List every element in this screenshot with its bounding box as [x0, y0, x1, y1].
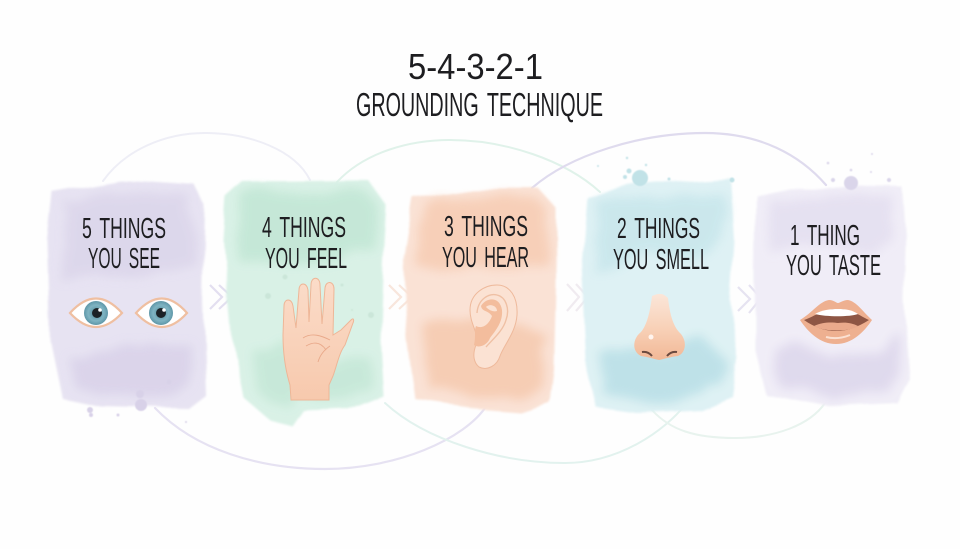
arrow: hear to smell — [567, 284, 588, 311]
icon: nose — [634, 294, 685, 360]
heading: 5 things you see: 5 THINGS — [82, 213, 166, 245]
title: GROUNDING TECHNIQUE — [356, 86, 603, 123]
panel: 1 thing you taste — [755, 153, 910, 407]
arrow: see to feel — [210, 285, 232, 309]
arrow: feel to hear — [389, 285, 412, 309]
panel: 3 things you hear — [404, 188, 556, 412]
heading: 5 things you see: YOU SEE — [88, 243, 160, 275]
panel: 4 things you feel — [223, 180, 386, 428]
heading: 4 things you feel: YOU FEEL — [265, 243, 347, 275]
heading: 1 thing you taste — [786, 220, 881, 282]
panel: 2 things you smell — [581, 157, 738, 413]
heading: 5 things you see — [82, 213, 166, 275]
icon: lips — [800, 300, 872, 344]
heading: 2 things you smell: YOU SMELL — [613, 244, 709, 276]
heading: 1 thing you taste: 1 THING — [790, 220, 860, 252]
arrow: smell to taste — [738, 285, 761, 313]
heading: 2 things you smell: 2 THINGS — [617, 213, 700, 245]
connecting loop lines — [103, 133, 826, 469]
heading: 2 things you smell — [613, 213, 709, 276]
heading: 3 things you hear: YOU HEAR — [442, 242, 529, 274]
title: 5-4-3-2-1 — [408, 46, 543, 87]
title — [356, 46, 603, 123]
heading: 4 things you feel — [262, 212, 347, 275]
icon: ear — [470, 285, 517, 368]
heading: 3 things you hear — [442, 211, 529, 274]
icon: eyes — [70, 298, 187, 327]
heading: 3 things you hear: 3 THINGS — [444, 211, 528, 243]
heading: 4 things you feel: 4 THINGS — [262, 212, 346, 244]
heading: 1 thing you taste: YOU TASTE — [786, 250, 881, 282]
panel: 5 things you see — [47, 180, 205, 423]
icon: open hand — [283, 278, 354, 400]
